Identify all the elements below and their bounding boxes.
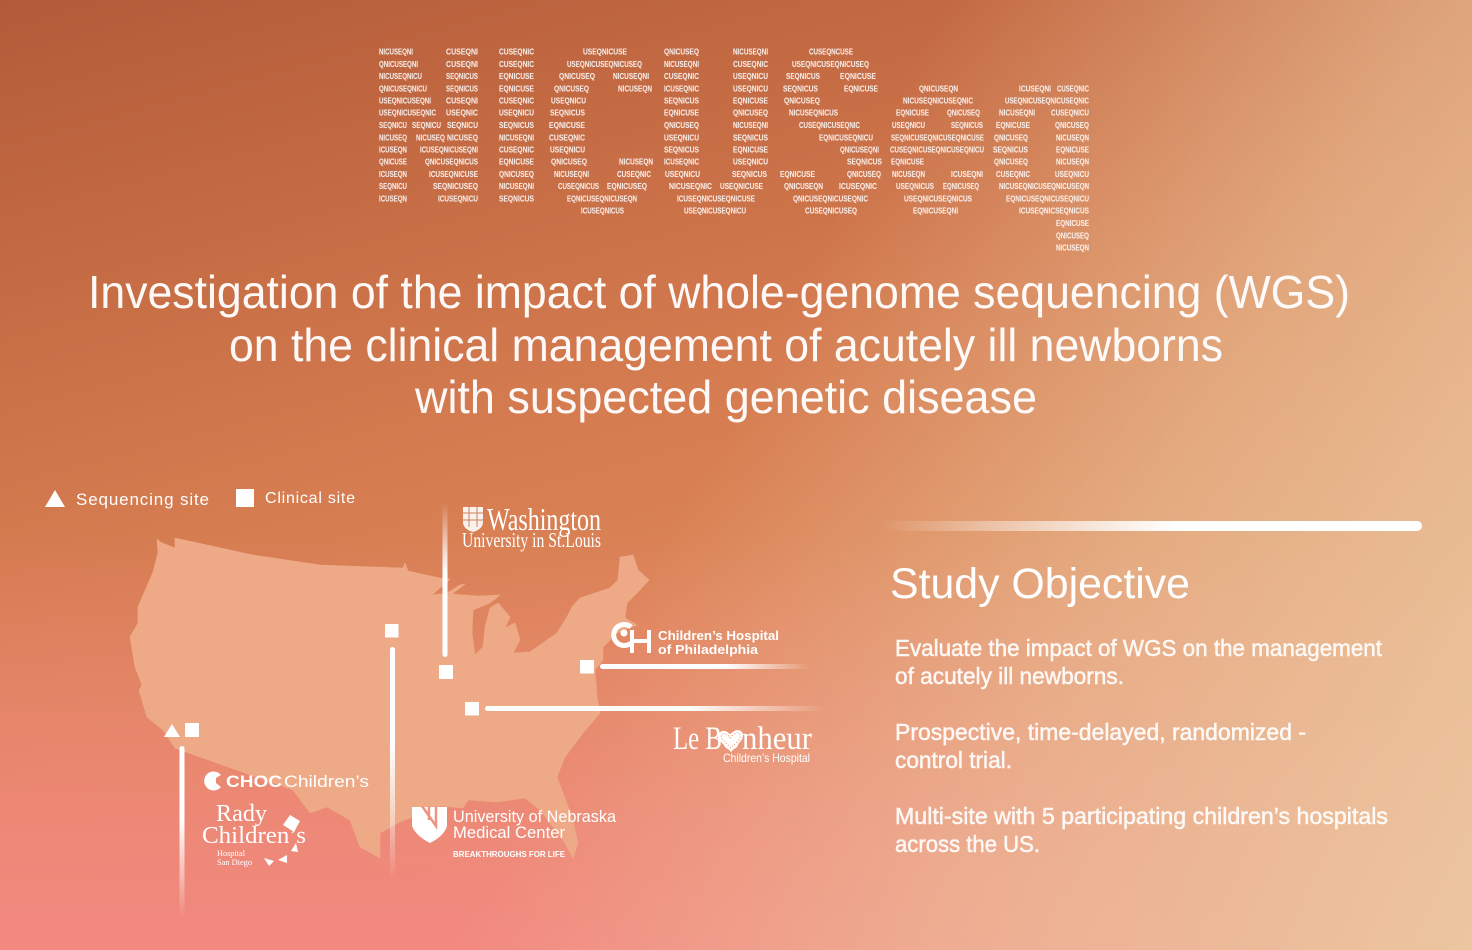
title: [88, 266, 1350, 423]
legend icon: clinical site square: [236, 489, 254, 507]
letter N: ICUSEQNICUSE: [429, 169, 478, 179]
logo: Washington University in St. Louis: Washington: [487, 501, 601, 537]
body: objective points: across the US.: [895, 831, 1040, 857]
logo: Rady Children's Hospital San Diego: Rady: [216, 801, 267, 827]
letter E: SEQNICUS: [951, 120, 983, 130]
letter U: SEQNICUS: [733, 132, 768, 142]
letter C: NICUSEQN: [619, 157, 653, 167]
logo: Washington University in St. Louis: University in St.Louis: [462, 528, 601, 552]
letter I: QNICUSEQ: [499, 169, 534, 179]
letter Q: QNICUSEQ: [1056, 230, 1089, 240]
letter U: ICUSEQNICUSEQNICUSE: [677, 194, 755, 204]
letter U: CUSEQNIC: [733, 59, 768, 69]
letter U: EQNICUSE: [733, 144, 768, 154]
legend label: sequencing site: Sequencing site: [76, 490, 209, 509]
letter C: NICUSEQN: [618, 83, 652, 93]
letter C: USEQNICUSE: [583, 47, 627, 57]
letter S: QNICUSEQN: [784, 181, 823, 191]
letter S: SEQNICUS: [847, 157, 882, 167]
letter C: QNICUSEQ: [551, 157, 587, 167]
body: objective points: Evaluate the impact of WGS on the management: [895, 635, 1383, 661]
letter N: CUSEQNI: [446, 96, 478, 106]
logo: Children's Hospital of Philadelphia: Children’s Hospital: [658, 629, 779, 643]
letter U: QNICUSEQ: [664, 120, 699, 130]
logo: Le Bonheur Children's Hospital: Le B: [673, 721, 722, 757]
title: on the clinical management of acutely ill newborns: [229, 319, 1223, 371]
letter C: [549, 47, 653, 216]
letter U: SEQNICUS: [732, 169, 767, 179]
letter N: ICUSEQN: [379, 144, 407, 154]
title: with suspected genetic disease: [414, 371, 1037, 423]
wordmark: NICUSEQ made of repeated words: [379, 47, 1089, 253]
letter Q: USEQNICUSEQNICUSEQNIC: [1005, 96, 1089, 106]
letter U: NICUSEQNI: [733, 120, 768, 130]
letter Q: USEQNICU: [1055, 169, 1089, 179]
letter E: EQNICUSEQ: [943, 181, 979, 191]
letter U: SEQNICUS: [664, 144, 699, 154]
letter N: QNICUSEQNICU: [379, 83, 427, 93]
letter E: EQNICUSEQNI: [913, 206, 958, 216]
logo: CHOC Children's: Children’s: [284, 772, 369, 791]
logo: University of Nebraska Medical Center: University of Nebraska: [453, 807, 617, 826]
letter E: CUSEQNICUSEQNICUSEQNICU: [890, 144, 984, 154]
letter C: EQNICUSEQNICUSEQN: [567, 194, 637, 204]
letter S: USEQNICUSEQNICUSEQ: [792, 59, 869, 69]
letter Q: NICUSEQN: [1056, 132, 1089, 142]
letter S: EQNICUSEQNICU: [819, 132, 873, 142]
letter I: SEQNICUS: [499, 194, 534, 204]
letter N: NICUSEQNI: [379, 47, 413, 57]
letter E: ICUSEQNI: [951, 169, 983, 179]
logo: CHOC Children's: CHOC: [226, 772, 282, 791]
letter N: QNICUSEQNI: [379, 59, 418, 69]
letter Q: EQNICUSE: [1056, 218, 1089, 228]
logo: University of Nebraska Medical Center: BREAKTHROUGHS FOR LIFE: [453, 850, 566, 859]
letter I: SEQNICUS: [499, 120, 534, 130]
letter U: QNICUSEQ: [664, 47, 699, 57]
letter I: NICUSEQNI: [499, 181, 534, 191]
letter S: QNICUSEQNI: [840, 144, 879, 154]
letter Q: SEQNICUS: [993, 144, 1028, 154]
letter I: CUSEQNIC: [499, 96, 534, 106]
letter Q: ICUSEQNI: [1019, 83, 1051, 93]
letter E: USEQNICU: [892, 120, 925, 130]
letter E: USEQNICUS: [896, 181, 934, 191]
letter N: SEQNICU: [379, 181, 407, 191]
letter I: NICUSEQNI: [499, 132, 534, 142]
letter S: CUSEQNICUSEQNIC: [799, 120, 860, 130]
letter Q: ICUSEQNICSEQNICUS: [1019, 206, 1089, 216]
letter E: QNICUSEQN: [919, 83, 958, 93]
letter U: ICUSEQNIC: [664, 83, 699, 93]
legend icon: sequencing site triangle: [45, 490, 65, 507]
letter S: QNICUSEQ: [847, 169, 881, 179]
letter E: USEQNICUSEQNICUS: [904, 194, 972, 204]
title: Investigation of the impact of whole-genome sequencing (WGS): [88, 266, 1350, 318]
letter S: EQNICUSE: [844, 83, 878, 93]
site marker: San Diego clinical site: [185, 723, 199, 737]
letter N: ICUSEQN: [379, 169, 407, 179]
letter N: NICUSEQNICU: [379, 71, 422, 81]
letter S: SEQNICUS: [783, 83, 818, 93]
letter Q: NICUSEQNICUSEQNICUSEQN: [999, 181, 1089, 191]
logo: Le Bonheur Children's Hospital: nheur: [742, 721, 812, 757]
letter S: NICUSEQNICUS: [789, 108, 838, 118]
letter N: CUSEQNI: [446, 47, 478, 57]
letter Q: CUSEQNIC: [1057, 83, 1089, 93]
letter U: USEQNICUSE: [720, 181, 763, 191]
letter E: EQNICUSE: [891, 157, 924, 167]
letter N: ICUSEQN: [379, 194, 407, 204]
logo: Washington University in St. Louis: [462, 501, 601, 552]
logo: Rady Children's Hospital San Diego: [202, 801, 306, 867]
letter U: NICUSEQNI: [733, 47, 768, 57]
letter E: SEQNICUSEQNICUSEQNICUSE: [891, 132, 984, 142]
letter E: QNICUSEQ: [947, 108, 980, 118]
letter U: ICUSEQNIC: [664, 157, 699, 167]
letter U: USEQNICU: [733, 83, 768, 93]
letter U: USEQNICU: [733, 71, 768, 81]
letter U: USEQNICU: [664, 132, 699, 142]
site marker: Philadelphia clinical site: [580, 660, 594, 674]
letter N: SEQNICU: [379, 120, 407, 130]
letter N: [379, 47, 478, 204]
letter C: USEQNICU: [551, 96, 586, 106]
letter I: CUSEQNIC: [499, 144, 534, 154]
letter C: ICUSEQNICUS: [581, 206, 624, 216]
logo: University of Nebraska Medical Center: Medical Center: [453, 823, 565, 842]
site marker: Omaha clinical site: [385, 624, 398, 638]
letter E: NICUSEQN: [892, 169, 925, 179]
body: objective points: Prospective, time-delayed, randomized -: [895, 719, 1306, 745]
letter U: CUSEQNIC: [664, 71, 699, 81]
letter E: [890, 83, 984, 216]
letter U: EQNICUSE: [733, 96, 768, 106]
connector: Philadelphia: [600, 664, 810, 669]
logo: Le Bonheur Children's Hospital: Children’s Hospital: [723, 751, 810, 765]
letter S: CUSEQNCUSE: [809, 47, 853, 57]
letter C: NICUSEQNI: [554, 169, 589, 179]
letter Q: NICUSEQN: [1056, 243, 1089, 253]
letter Q: NICUSEQNI: [999, 108, 1035, 118]
letter Q: CUSEQNICU: [1051, 108, 1089, 118]
panel: study objective: [880, 521, 1422, 857]
letter I: EQNICUSE: [499, 71, 534, 81]
letter C: USEQNICU: [550, 144, 585, 154]
letter I: EQNICUSE: [499, 157, 534, 167]
letter N: ICUSEQNICUSEQNI: [420, 144, 478, 154]
site marker: San Diego sequencing site: [164, 724, 180, 737]
letter Q: EQNICUSEQNICUSEQNICU: [1006, 194, 1089, 204]
body: objective points: of acutely ill newborns.: [895, 663, 1124, 689]
letter N: SEQNICU: [447, 120, 478, 130]
letter C: QNICUSEQ: [559, 71, 595, 81]
letter C: QNICUSEQ: [554, 83, 589, 93]
letter U: NICUSEQNI: [664, 59, 699, 69]
logo: Rady Children's Hospital San Diego: Children’s: [202, 823, 306, 849]
letter E: EQNICUSE: [896, 108, 929, 118]
letter Q: CUSEQNIC: [996, 169, 1030, 179]
letter U: SEQNICUS: [664, 96, 699, 106]
letter N: QNICUSEQNICUS: [425, 157, 478, 167]
logo: Children's Hospital of Philadelphia: [614, 625, 779, 657]
letter Q: EQNICUSE: [996, 120, 1030, 130]
letter N: SEQNICUS: [446, 71, 478, 81]
logo: Rady Children's Hospital San Diego: Hospital: [217, 848, 246, 858]
letter Q: NICUSEQN: [1056, 157, 1089, 167]
legend label: clinical site: Clinical site: [265, 490, 355, 507]
letter N: NICUSEQ: [379, 132, 407, 142]
letter N: USEQNICUSEQNI: [379, 96, 431, 106]
letter N: QNICUSE: [379, 157, 407, 167]
letter U: QNICUSEQ: [733, 108, 768, 118]
letter U: [664, 47, 768, 216]
letter S: QNICUSEQ: [784, 96, 820, 106]
letter N: SEQNICUS: [446, 83, 478, 93]
heading: study objective: Study Objective: [890, 560, 1190, 608]
letter C: CUSEQNIC: [617, 169, 651, 179]
letter Q: QNICUSEQ: [994, 132, 1028, 142]
letter N: SEQNICUSEQ: [433, 181, 478, 191]
letter E: NICUSEQNICUSEQNIC: [903, 96, 973, 106]
letter U: USEQNICU: [665, 169, 700, 179]
logo: Le Bonheur Children's Hospital: [673, 721, 812, 765]
connector: Nebraska: [390, 647, 395, 880]
letter N: ICUSEQNICU: [438, 194, 478, 204]
letter C: CUSEQNIC: [549, 132, 585, 142]
letter S: EQNICUSE: [840, 71, 876, 81]
letter C: EQNICUSEQ: [607, 181, 647, 191]
map of United States: [130, 538, 649, 858]
logo: University of Nebraska Medical Center: [412, 806, 617, 859]
body: objective points: [895, 635, 1388, 857]
logo: Le Bonheur Children's Hospital: o: [722, 721, 740, 757]
letter N: NICUSEQ: [447, 132, 478, 142]
letter Q: EQNICUSE: [1056, 144, 1089, 154]
letter C: SEQNICUS: [550, 108, 585, 118]
connector: San Diego: [180, 746, 184, 918]
logo: Rady Children's Hospital San Diego: San Diego: [217, 857, 252, 867]
body: objective points: Multi-site with 5 participating children’s hospitals: [895, 803, 1388, 829]
decorative heading bar: [880, 521, 1422, 531]
site marker: St. Louis clinical site: [439, 665, 453, 679]
letter S: QNICUSEQNICUSEQNIC: [793, 194, 868, 204]
letter I: USEQNICU: [499, 108, 534, 118]
letter Q: QNICUSEQ: [1055, 120, 1089, 130]
letter Q: QNICUSEQ: [994, 157, 1028, 167]
letter I: [499, 47, 534, 204]
legend: [45, 489, 355, 509]
letter Q: [993, 83, 1089, 253]
logo: Children's Hospital of Philadelphia: of Philadelphia: [658, 643, 759, 657]
letter U: EQNICUSE: [664, 108, 699, 118]
letter N: CUSEQNI: [446, 59, 478, 69]
letter U: NICUSEQNIC: [669, 181, 712, 191]
letter S: EQNICUSE: [780, 169, 815, 179]
letter N: USEQNICUSEQNIC: [379, 108, 436, 118]
logo: CHOC Children's: [204, 771, 369, 791]
connector: Washington University: [442, 503, 448, 657]
letter N: USEQNIC: [446, 108, 478, 118]
site marker: Memphis clinical site: [465, 702, 479, 716]
body: objective points: control trial.: [895, 747, 1012, 773]
letter S: ICUSEQNIC: [839, 181, 877, 191]
letter C: NICUSEQNI: [613, 71, 649, 81]
letter U: USEQNICUSEQNICU: [684, 206, 746, 216]
letter I: EQNICUSE: [499, 83, 534, 93]
letter S: CUSEQNICUSEQ: [805, 206, 857, 216]
letter S: [780, 47, 882, 216]
letter I: CUSEQNIC: [499, 47, 534, 57]
connector: Le Bonheur: [485, 706, 825, 711]
letter I: CUSEQNIC: [499, 59, 534, 69]
letter C: EQNICUSE: [549, 120, 585, 130]
letter C: USEQNICUSEQNICUSEQ: [567, 59, 642, 69]
letter S: SEQNICUS: [786, 71, 820, 81]
letter U: USEQNICU: [733, 157, 768, 167]
letter N: SEQNICU: [412, 120, 441, 130]
letter N: NICUSEQ: [416, 132, 445, 142]
letter C: CUSEQNICUS: [558, 181, 599, 191]
